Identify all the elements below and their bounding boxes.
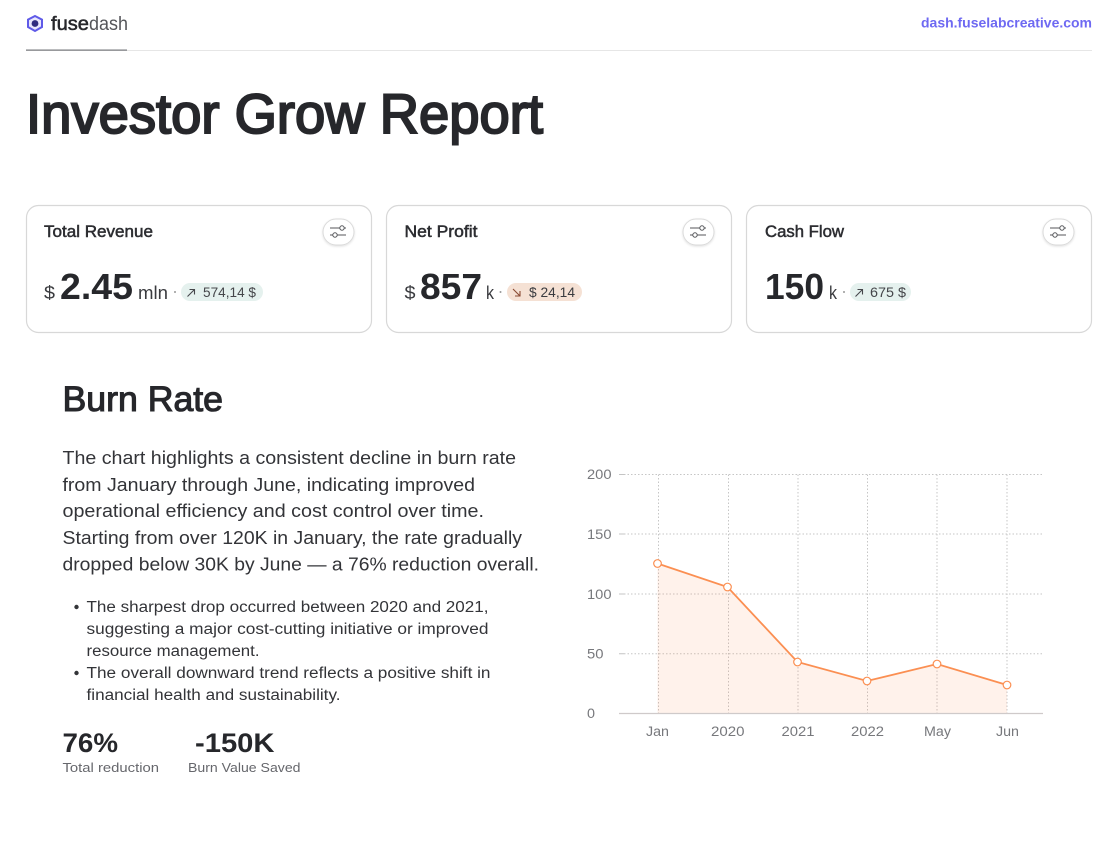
y axis labels: 0 — [587, 706, 595, 721]
icon: filter button — [323, 219, 354, 245]
x axis labels: May — [924, 724, 951, 739]
text block: bullet list: The sharpest drop occurred between 2020 and 2021, — [86, 599, 488, 616]
site url: dash.fuselabcreative.com — [921, 16, 1092, 30]
logo wordmark: dash — [89, 14, 128, 35]
metric value: $ — [44, 283, 55, 303]
y axis labels: 50 — [587, 646, 604, 662]
icon: logo — [28, 16, 42, 31]
metric value — [404, 266, 502, 307]
y axis labels: 150 — [587, 527, 612, 542]
header — [26, 14, 1092, 51]
logo wordmark: fuse — [51, 14, 89, 35]
panel: cash flow — [746, 206, 1092, 332]
text block: bullet list: The overall downward trend reflects a positive shift in — [86, 665, 490, 682]
card title: Total Revenue — [44, 223, 153, 241]
text block: summary: Starting from over 120K in January, the rate gradually — [62, 527, 523, 548]
metric value: 150 — [765, 266, 824, 307]
metric value: 2.45 — [60, 266, 133, 307]
text block: bullet list — [74, 599, 491, 704]
change badge: 675 $ — [870, 285, 907, 300]
x axis — [619, 712, 1043, 714]
change badge: $ 24,14 — [529, 285, 575, 300]
change badge — [507, 283, 582, 301]
stat: burn value saved: -150K — [195, 728, 275, 758]
data points — [654, 560, 1011, 689]
x axis labels: 2020 — [711, 724, 744, 739]
text block: summary — [62, 447, 539, 574]
line chart — [587, 467, 1043, 739]
metric value: mln — [138, 283, 168, 303]
x axis labels: Jun — [996, 724, 1019, 739]
metric value: $ — [404, 283, 416, 303]
text block: summary: from January through June, indicating improved — [62, 474, 475, 495]
text block: bullet list: resource management. — [86, 643, 260, 660]
y axis labels: 100 — [587, 587, 612, 602]
area fill — [658, 564, 1007, 714]
stat: burn value saved — [188, 728, 300, 775]
text block: bullet list: financial health and sustainability. — [86, 687, 340, 704]
stat: total reduction: Total reduction — [62, 760, 159, 775]
icon: filter button — [1043, 219, 1074, 245]
x axis labels: Jan — [646, 724, 669, 739]
stat: total reduction — [62, 728, 159, 775]
icon: filter button — [683, 219, 714, 245]
y axis labels — [587, 467, 612, 721]
card title: Cash Flow — [765, 223, 844, 241]
change badge: 574,14 $ — [203, 285, 256, 300]
text block: bullet list: suggesting a major cost-cutting initiative or improved — [86, 621, 488, 638]
card title: Net Profit — [404, 223, 478, 241]
x axis labels: 2022 — [851, 724, 884, 739]
panel: total revenue — [26, 206, 372, 332]
metric value: k — [486, 283, 495, 303]
change badge — [181, 283, 263, 301]
stat: total reduction: 76% — [62, 728, 118, 758]
y axis labels: 200 — [587, 467, 612, 482]
logo wordmark — [51, 14, 128, 35]
text block: summary: operational efficiency and cost control over time. — [62, 500, 484, 521]
metric value: 857 — [420, 266, 482, 307]
change badge — [850, 283, 911, 301]
metric value — [44, 266, 176, 307]
metric value: k — [829, 283, 838, 303]
heading: burn rate: Burn Rate — [62, 380, 223, 419]
panel: net profit — [386, 206, 732, 332]
text block: summary: The chart highlights a consistent decline in burn rate — [62, 447, 516, 468]
stat: burn value saved: Burn Value Saved — [188, 760, 300, 775]
title: Investor Grow Report — [26, 82, 543, 145]
x axis labels — [646, 724, 1019, 739]
data line — [658, 564, 1007, 685]
text block: summary: dropped below 30K by June — a 76% reduction overall. — [62, 554, 539, 574]
x axis labels: 2021 — [782, 724, 814, 739]
